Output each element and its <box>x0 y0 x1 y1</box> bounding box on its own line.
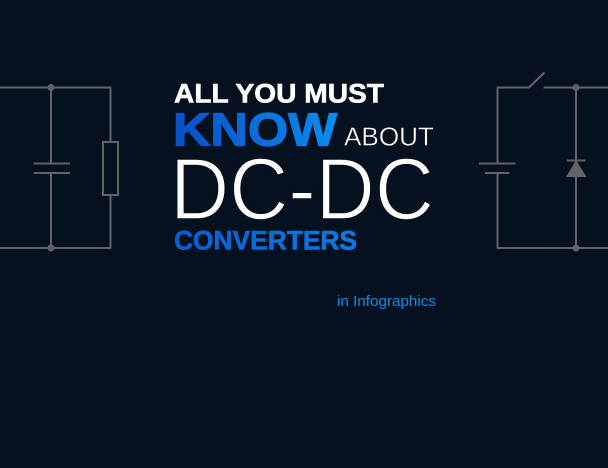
left circuit: capacitor and resistor <box>0 85 118 250</box>
right circuit: switch, battery and diode <box>479 72 608 250</box>
subtitle: in Infographics <box>337 293 436 310</box>
title <box>170 78 434 256</box>
title line: converters: CONVERTERS <box>174 226 357 256</box>
title line: dc-dc: DC-DC <box>170 141 434 238</box>
title word: about: ABOUT <box>344 122 434 152</box>
title word: know: KNOW <box>173 104 338 156</box>
title line: all you must: ALL YOU MUST <box>174 78 385 108</box>
